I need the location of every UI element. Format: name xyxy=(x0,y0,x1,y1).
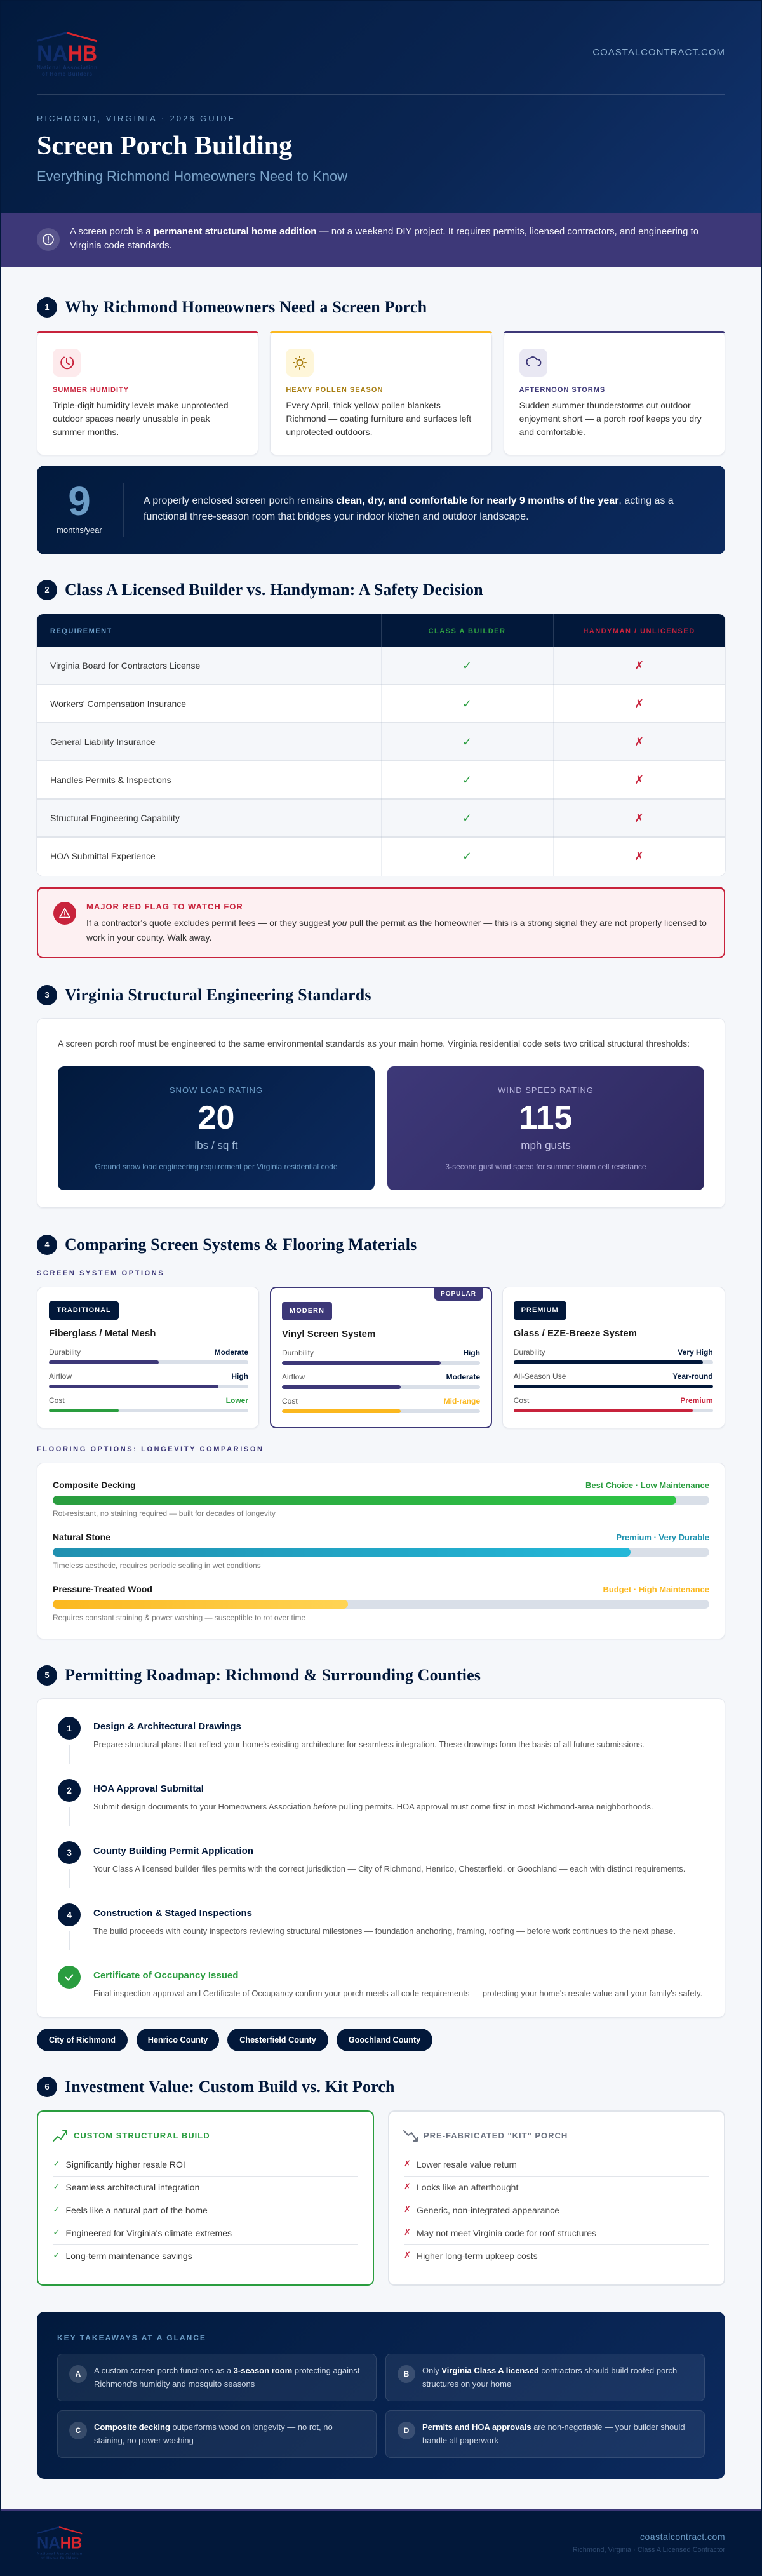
row: General Liability Insurance xyxy=(50,737,156,747)
text: Richmond — coating furniture and surfaces left xyxy=(286,413,471,424)
tag: PREMIUM xyxy=(521,1306,559,1314)
row: ✗ xyxy=(634,697,644,711)
tile: snow load: lbs / sq ft xyxy=(194,1139,238,1151)
item xyxy=(404,2228,596,2238)
row: ✓ xyxy=(462,697,472,711)
subheading: flooring: FLOORING OPTIONS: LONGEVITY COMPARISON xyxy=(37,1446,264,1453)
bar chart row: composite: Rot-resistant, no staining required — built for decades of longevity xyxy=(53,1509,276,1518)
heading: section 6: 6 xyxy=(44,2082,50,2091)
footer note: Richmond, Virginia · Class A Licensed Contractor xyxy=(573,2546,725,2554)
panel: kit porch: May not meet Virginia code for roof structures xyxy=(417,2228,596,2238)
item xyxy=(404,2182,518,2192)
heading: section 5: Permitting Roadmap: Richmond & Surrounding Counties xyxy=(65,1666,481,1684)
table header: REQUIREMENT xyxy=(50,627,112,635)
stat text: A properly enclosed screen porch remains clean, dry, and comfortable for nearly 9 months of the year, acting as a xyxy=(144,495,674,506)
step 5: Certificate of Occupancy Issued xyxy=(93,1970,238,1981)
metrics xyxy=(513,1348,713,1412)
takeaway C: staining, no power washing xyxy=(94,2436,194,2445)
metrics: Durability xyxy=(282,1348,314,1357)
panel: kit porch: ✗ xyxy=(404,2159,411,2169)
ribbon xyxy=(434,1287,483,1301)
takeaway C: C xyxy=(76,2426,81,2435)
panel: kit porch: Lower resale value return xyxy=(417,2159,517,2170)
table header: CLASS A BUILDER xyxy=(429,627,505,635)
heading: section 1: Why Richmond Homeowners Need a Screen Porch xyxy=(65,298,427,316)
icon: alert circle xyxy=(37,228,60,251)
metrics: Cost xyxy=(514,1396,529,1405)
pill: city of richmond xyxy=(37,2029,128,2051)
text: Sudden summer thunderstorms cut outdoor xyxy=(519,400,691,410)
tile: wind speed: 3-second gust wind speed for summer storm cell resistance xyxy=(445,1162,646,1171)
heading: section 5: 5 xyxy=(44,1670,50,1680)
item xyxy=(404,2159,517,2170)
subtitle: Everything Richmond Homeowners Need to Know xyxy=(37,168,347,184)
item xyxy=(53,2159,185,2170)
tile: snow load: 20 xyxy=(198,1099,234,1136)
alert label: MAJOR RED FLAG TO WATCH FOR xyxy=(86,902,243,911)
tag xyxy=(282,1302,332,1320)
name: Fiberglass / Metal Mesh xyxy=(49,1328,156,1339)
text xyxy=(286,400,471,437)
metrics: Very High xyxy=(678,1348,713,1357)
step 2 xyxy=(58,1779,653,1826)
heading: section 1: 1 xyxy=(44,302,50,312)
table header xyxy=(37,614,725,647)
logo: NAHB: of Home Builders xyxy=(41,2557,79,2561)
pill: chesterfield xyxy=(227,2029,328,2051)
panel: engineering standards xyxy=(37,1018,725,1208)
text: outdoor spaces nearly unusable in peak xyxy=(53,413,210,424)
label: SUMMER HUMIDITY xyxy=(53,386,129,394)
bar chart row: wood xyxy=(53,1584,709,1622)
alert text: If a contractor's quote excludes permit fees — or they suggest you pull the permit as the homeowner — this is a strong signal they are not properly licensed to xyxy=(86,918,707,928)
takeaway D: handle all paperwork xyxy=(422,2436,498,2445)
takeaway B: structures on your home xyxy=(422,2379,511,2389)
icon: humidity xyxy=(53,349,81,377)
logo: NAHB xyxy=(37,32,97,77)
tile: wind speed: mph gusts xyxy=(521,1139,571,1151)
row: ✓ xyxy=(462,774,472,787)
row: Virginia Board for Contractors License xyxy=(50,661,200,671)
panel: kit porch: ✗ xyxy=(404,2205,411,2215)
bar chart row: stone: Premium · Very Durable xyxy=(616,1533,709,1542)
icon: warning xyxy=(53,902,76,925)
header xyxy=(0,0,762,213)
panel: custom build: Long-term maintenance savings xyxy=(66,2251,192,2261)
text: Every April, thick yellow pollen blankets xyxy=(286,400,441,410)
text: unprotected outdoors. xyxy=(286,427,373,437)
metrics: High xyxy=(463,1348,480,1357)
row: ✗ xyxy=(634,774,644,787)
panel: kit porch: Generic, non-integrated appearance xyxy=(417,2205,559,2215)
ribbon: POPULAR xyxy=(441,1291,476,1298)
pill: henrico: Henrico County xyxy=(148,2036,208,2044)
subheading: screen systems: SCREEN SYSTEM OPTIONS xyxy=(37,1270,164,1277)
pill: chesterfield: Chesterfield County xyxy=(239,2036,316,2044)
takeaway B xyxy=(385,2354,705,2401)
step 5 xyxy=(58,1966,702,1998)
heading: section 2: Class A Licensed Builder vs. Handyman: A Safety Decision xyxy=(65,580,483,599)
intro text: A screen porch roof must be engineered to the same environmental standards as your main home. Virginia residential code sets two critical structural thresholds: xyxy=(58,1038,690,1049)
row xyxy=(37,800,725,838)
panel: custom build: Significantly higher resale ROI xyxy=(66,2159,185,2170)
panel: custom build: ✓ xyxy=(53,2228,60,2237)
item xyxy=(53,2205,208,2215)
icon: trending up xyxy=(53,2130,67,2142)
tile: wind speed: 115 xyxy=(519,1099,572,1136)
step 1: Design & Architectural Drawings xyxy=(93,1721,241,1732)
card: pollen xyxy=(270,331,492,455)
pill: henrico xyxy=(137,2029,219,2051)
metrics xyxy=(282,1348,480,1413)
step 1: 1 xyxy=(67,1723,72,1733)
takeaway A: A custom screen porch functions as a 3-season room protecting against xyxy=(94,2366,359,2375)
logo: NAHB xyxy=(37,2526,83,2561)
item xyxy=(53,2251,192,2261)
text: summer months. xyxy=(53,427,119,437)
item xyxy=(53,2182,199,2192)
name: Vinyl Screen System xyxy=(282,1329,375,1339)
logo: NAHB: National Association xyxy=(37,2552,83,2556)
tile: wind speed: WIND SPEED RATING xyxy=(498,1085,594,1095)
metrics xyxy=(49,1348,248,1412)
metrics: Premium xyxy=(680,1396,713,1405)
takeaway D xyxy=(385,2410,705,2458)
panel title: CUSTOM STRUCTURAL BUILD xyxy=(74,2131,210,2140)
panel: key takeaways xyxy=(37,2312,725,2479)
bar chart row: composite: Composite Decking xyxy=(53,1480,136,1490)
alert: red flag xyxy=(37,887,725,958)
row: Workers' Compensation Insurance xyxy=(50,699,186,709)
heading: section 3: 3 xyxy=(44,990,50,1000)
row: ✗ xyxy=(634,850,644,863)
card: fiberglass xyxy=(37,1287,259,1428)
heading: section 6: Investment Value: Custom Build vs. Kit Porch xyxy=(65,2077,395,2096)
row xyxy=(37,685,725,723)
card: vinyl (popular) xyxy=(270,1287,492,1428)
takeaway B: Only Virginia Class A licensed contractors should build roofed porch xyxy=(422,2366,677,2375)
card: summer humidity xyxy=(37,331,258,455)
metrics: Cost xyxy=(282,1397,298,1405)
alert text xyxy=(86,918,707,943)
tag: MODERN xyxy=(290,1307,324,1315)
intro text xyxy=(70,226,698,251)
step 2: Submit design documents to your Homeowners Association before pulling permits. HOA approval must come first in most Richmond-area neighborhoods. xyxy=(93,1802,653,1811)
takeaway C: Composite decking outperforms wood on longevity — no rot, no xyxy=(94,2422,333,2432)
icon: sun xyxy=(286,349,314,377)
step 4: Construction & Staged Inspections xyxy=(93,1908,252,1919)
step 2: 2 xyxy=(67,1785,72,1795)
stat number: 9 xyxy=(68,478,91,524)
row: ✗ xyxy=(634,735,644,749)
metrics: Durability xyxy=(49,1348,81,1357)
tile: wind speed xyxy=(387,1066,704,1190)
heading: section 4: Comparing Screen Systems & Flooring Materials xyxy=(65,1235,417,1254)
item xyxy=(404,2205,559,2215)
bar chart row: stone: Natural Stone xyxy=(53,1532,110,1542)
heading: section 3: Virginia Structural Engineering Standards xyxy=(65,986,371,1004)
row: ✗ xyxy=(634,812,644,825)
pill: goochland xyxy=(337,2029,432,2051)
tile: snow load: Ground snow load engineering requirement per Virginia residential code xyxy=(95,1162,338,1171)
heading: section 4: 4 xyxy=(44,1240,50,1249)
panel: custom build: ✓ xyxy=(53,2251,60,2260)
panel: kit porch xyxy=(388,2110,725,2286)
panel: kit porch: ✗ xyxy=(404,2251,411,2260)
row: HOA Submittal Experience xyxy=(50,851,156,861)
metrics: Durability xyxy=(514,1348,545,1357)
stat text: functional three-season room that bridges your indoor kitchen and outdoor landscape. xyxy=(144,511,529,522)
row: ✓ xyxy=(462,735,472,749)
row: ✗ xyxy=(634,659,644,673)
panel: custom build: Seamless architectural integration xyxy=(66,2182,199,2192)
panel: custom build: Engineered for Virginia's climate extremes xyxy=(66,2228,232,2238)
metrics: Moderate xyxy=(446,1372,480,1381)
panel: custom build: Feels like a natural part of the home xyxy=(66,2205,208,2215)
takeaway C xyxy=(57,2410,377,2458)
logo: NAHB: NA xyxy=(37,2533,60,2552)
panel: roadmap xyxy=(37,1698,725,2018)
logo: NAHB: National Association xyxy=(37,65,97,70)
site url: COASTALCONTRACT.COM xyxy=(592,47,725,58)
text xyxy=(519,400,702,437)
item xyxy=(53,2228,232,2238)
row: ✓ xyxy=(462,850,472,863)
row xyxy=(37,761,725,800)
metrics: Airflow xyxy=(282,1372,305,1381)
step 4 xyxy=(58,1903,676,1950)
row: Structural Engineering Capability xyxy=(50,813,180,823)
pill: goochland: Goochland County xyxy=(349,2036,420,2044)
title: Screen Porch Building xyxy=(37,131,292,161)
text: Triple-digit humidity levels make unprotected xyxy=(53,400,229,410)
row xyxy=(37,723,725,761)
footer url: coastalcontract.com xyxy=(640,2532,725,2542)
panel: custom build: ✓ xyxy=(53,2182,60,2192)
metrics: High xyxy=(231,1372,248,1381)
row xyxy=(37,647,725,685)
stat text xyxy=(144,495,674,522)
tile: snow load: SNOW LOAD RATING xyxy=(170,1085,263,1095)
row xyxy=(37,838,725,876)
metrics: Year-round xyxy=(672,1372,713,1381)
step 4: 4 xyxy=(67,1910,72,1920)
panel: custom build: ✓ xyxy=(53,2205,60,2215)
logo: NAHB: NA xyxy=(37,41,68,66)
panel: kit porch: ✗ xyxy=(404,2182,411,2192)
panel title: KEY TAKEAWAYS AT A GLANCE xyxy=(57,2333,206,2342)
text xyxy=(53,400,229,437)
text: and comfortable. xyxy=(519,427,585,437)
panel: custom build: ✓ xyxy=(53,2159,60,2169)
label: AFTERNOON STORMS xyxy=(519,386,605,394)
row: ✓ xyxy=(462,812,472,825)
metrics: Mid-range xyxy=(444,1397,480,1405)
name: Glass / EZE-Breeze System xyxy=(514,1328,637,1339)
bar chart row: composite: Best Choice · Low Maintenance xyxy=(585,1480,709,1490)
bar chart row: stone: Timeless aesthetic, requires periodic sealing in wet conditions xyxy=(53,1561,261,1570)
step 3: Your Class A licensed builder files permits with the correct jurisdiction — City of Richmond, Henrico, Chesterfield, or Goochland — each with distinct requirements. xyxy=(93,1864,685,1874)
panel title: PRE-FABRICATED "KIT" PORCH xyxy=(424,2131,568,2140)
metrics: Airflow xyxy=(49,1372,72,1381)
tag: TRADITIONAL xyxy=(57,1306,111,1314)
icon: trending down xyxy=(403,2130,418,2142)
icon: cloud xyxy=(519,349,547,377)
bar chart row: composite xyxy=(53,1480,709,1518)
card: storms xyxy=(504,331,725,455)
takeaway A: Richmond's humidity and mosquito seasons xyxy=(94,2379,255,2389)
heading: section 2: 2 xyxy=(44,585,50,594)
tile: snow load xyxy=(58,1066,375,1190)
panel: kit porch: Higher long-term upkeep costs xyxy=(417,2251,538,2261)
panel: kit porch: Looks like an afterthought xyxy=(417,2182,518,2192)
step 1: Prepare structural plans that reflect your home's existing architecture for seamless integration. These drawings form the basis of all future submissions. xyxy=(93,1740,645,1749)
panel: kit porch: ✗ xyxy=(404,2228,411,2237)
panel: flooring xyxy=(37,1463,725,1639)
metrics: Lower xyxy=(226,1396,248,1405)
item xyxy=(404,2251,538,2261)
label: HEAVY POLLEN SEASON xyxy=(286,386,383,394)
step 3 xyxy=(58,1841,685,1888)
takeaway D: Permits and HOA approvals are non-negotiable — your builder should xyxy=(422,2422,685,2432)
takeaway A: A xyxy=(76,2370,81,2378)
metrics: Cost xyxy=(49,1396,65,1405)
bar chart row: stone xyxy=(53,1532,709,1570)
intro text: A screen porch is a permanent structural home addition — not a weekend DIY project. It requires permits, licensed contractors, and engineering to xyxy=(70,226,698,237)
footer xyxy=(0,2509,762,2576)
row: ✓ xyxy=(462,659,472,673)
comparison table xyxy=(37,614,725,876)
step 3: 3 xyxy=(67,1848,72,1858)
takeaway B: B xyxy=(404,2370,409,2378)
step 2: HOA Approval Submittal xyxy=(93,1783,204,1794)
panel: custom build xyxy=(37,2110,374,2286)
table header: HANDYMAN / UNLICENSED xyxy=(583,627,695,635)
pill: city of richmond: City of Richmond xyxy=(49,2036,116,2044)
stat strip: 9 months xyxy=(37,466,725,554)
tag xyxy=(49,1301,119,1320)
alert text: work in your county. Walk away. xyxy=(86,932,211,943)
intro band xyxy=(0,213,762,267)
step 4: The build proceeds with county inspectors reviewing structural milestones — foundation anchoring, framing, roofing — before work continues to the next phase. xyxy=(93,1926,676,1936)
metrics: Moderate xyxy=(215,1348,248,1357)
bar chart row: wood: Budget · High Maintenance xyxy=(603,1585,709,1594)
step 5: Final inspection approval and Certificate of Occupancy confirm your porch meets all code requirements — protecting your home's resale value and your family's safety. xyxy=(93,1989,702,1998)
card: glass xyxy=(502,1287,725,1428)
metrics: All-Season Use xyxy=(514,1372,566,1381)
step 3: County Building Permit Application xyxy=(93,1846,253,1856)
text: enjoyment short — a porch roof keeps you dry xyxy=(519,413,702,424)
intro text: Virginia code standards. xyxy=(70,240,172,251)
step 1 xyxy=(58,1717,645,1764)
bar chart row: wood: Requires constant staining & power washing — susceptible to rot over time xyxy=(53,1613,305,1622)
bar chart row: wood: Pressure-Treated Wood xyxy=(53,1584,152,1594)
logo: NAHB: of Home Builders xyxy=(42,71,93,77)
takeaway D: D xyxy=(404,2426,409,2435)
stat unit: months/year xyxy=(57,525,102,535)
eyebrow: RICHMOND, VIRGINIA · 2026 GUIDE xyxy=(37,114,236,123)
takeaway A xyxy=(57,2354,377,2401)
row: Handles Permits & Inspections xyxy=(50,775,171,785)
tag xyxy=(514,1301,566,1320)
